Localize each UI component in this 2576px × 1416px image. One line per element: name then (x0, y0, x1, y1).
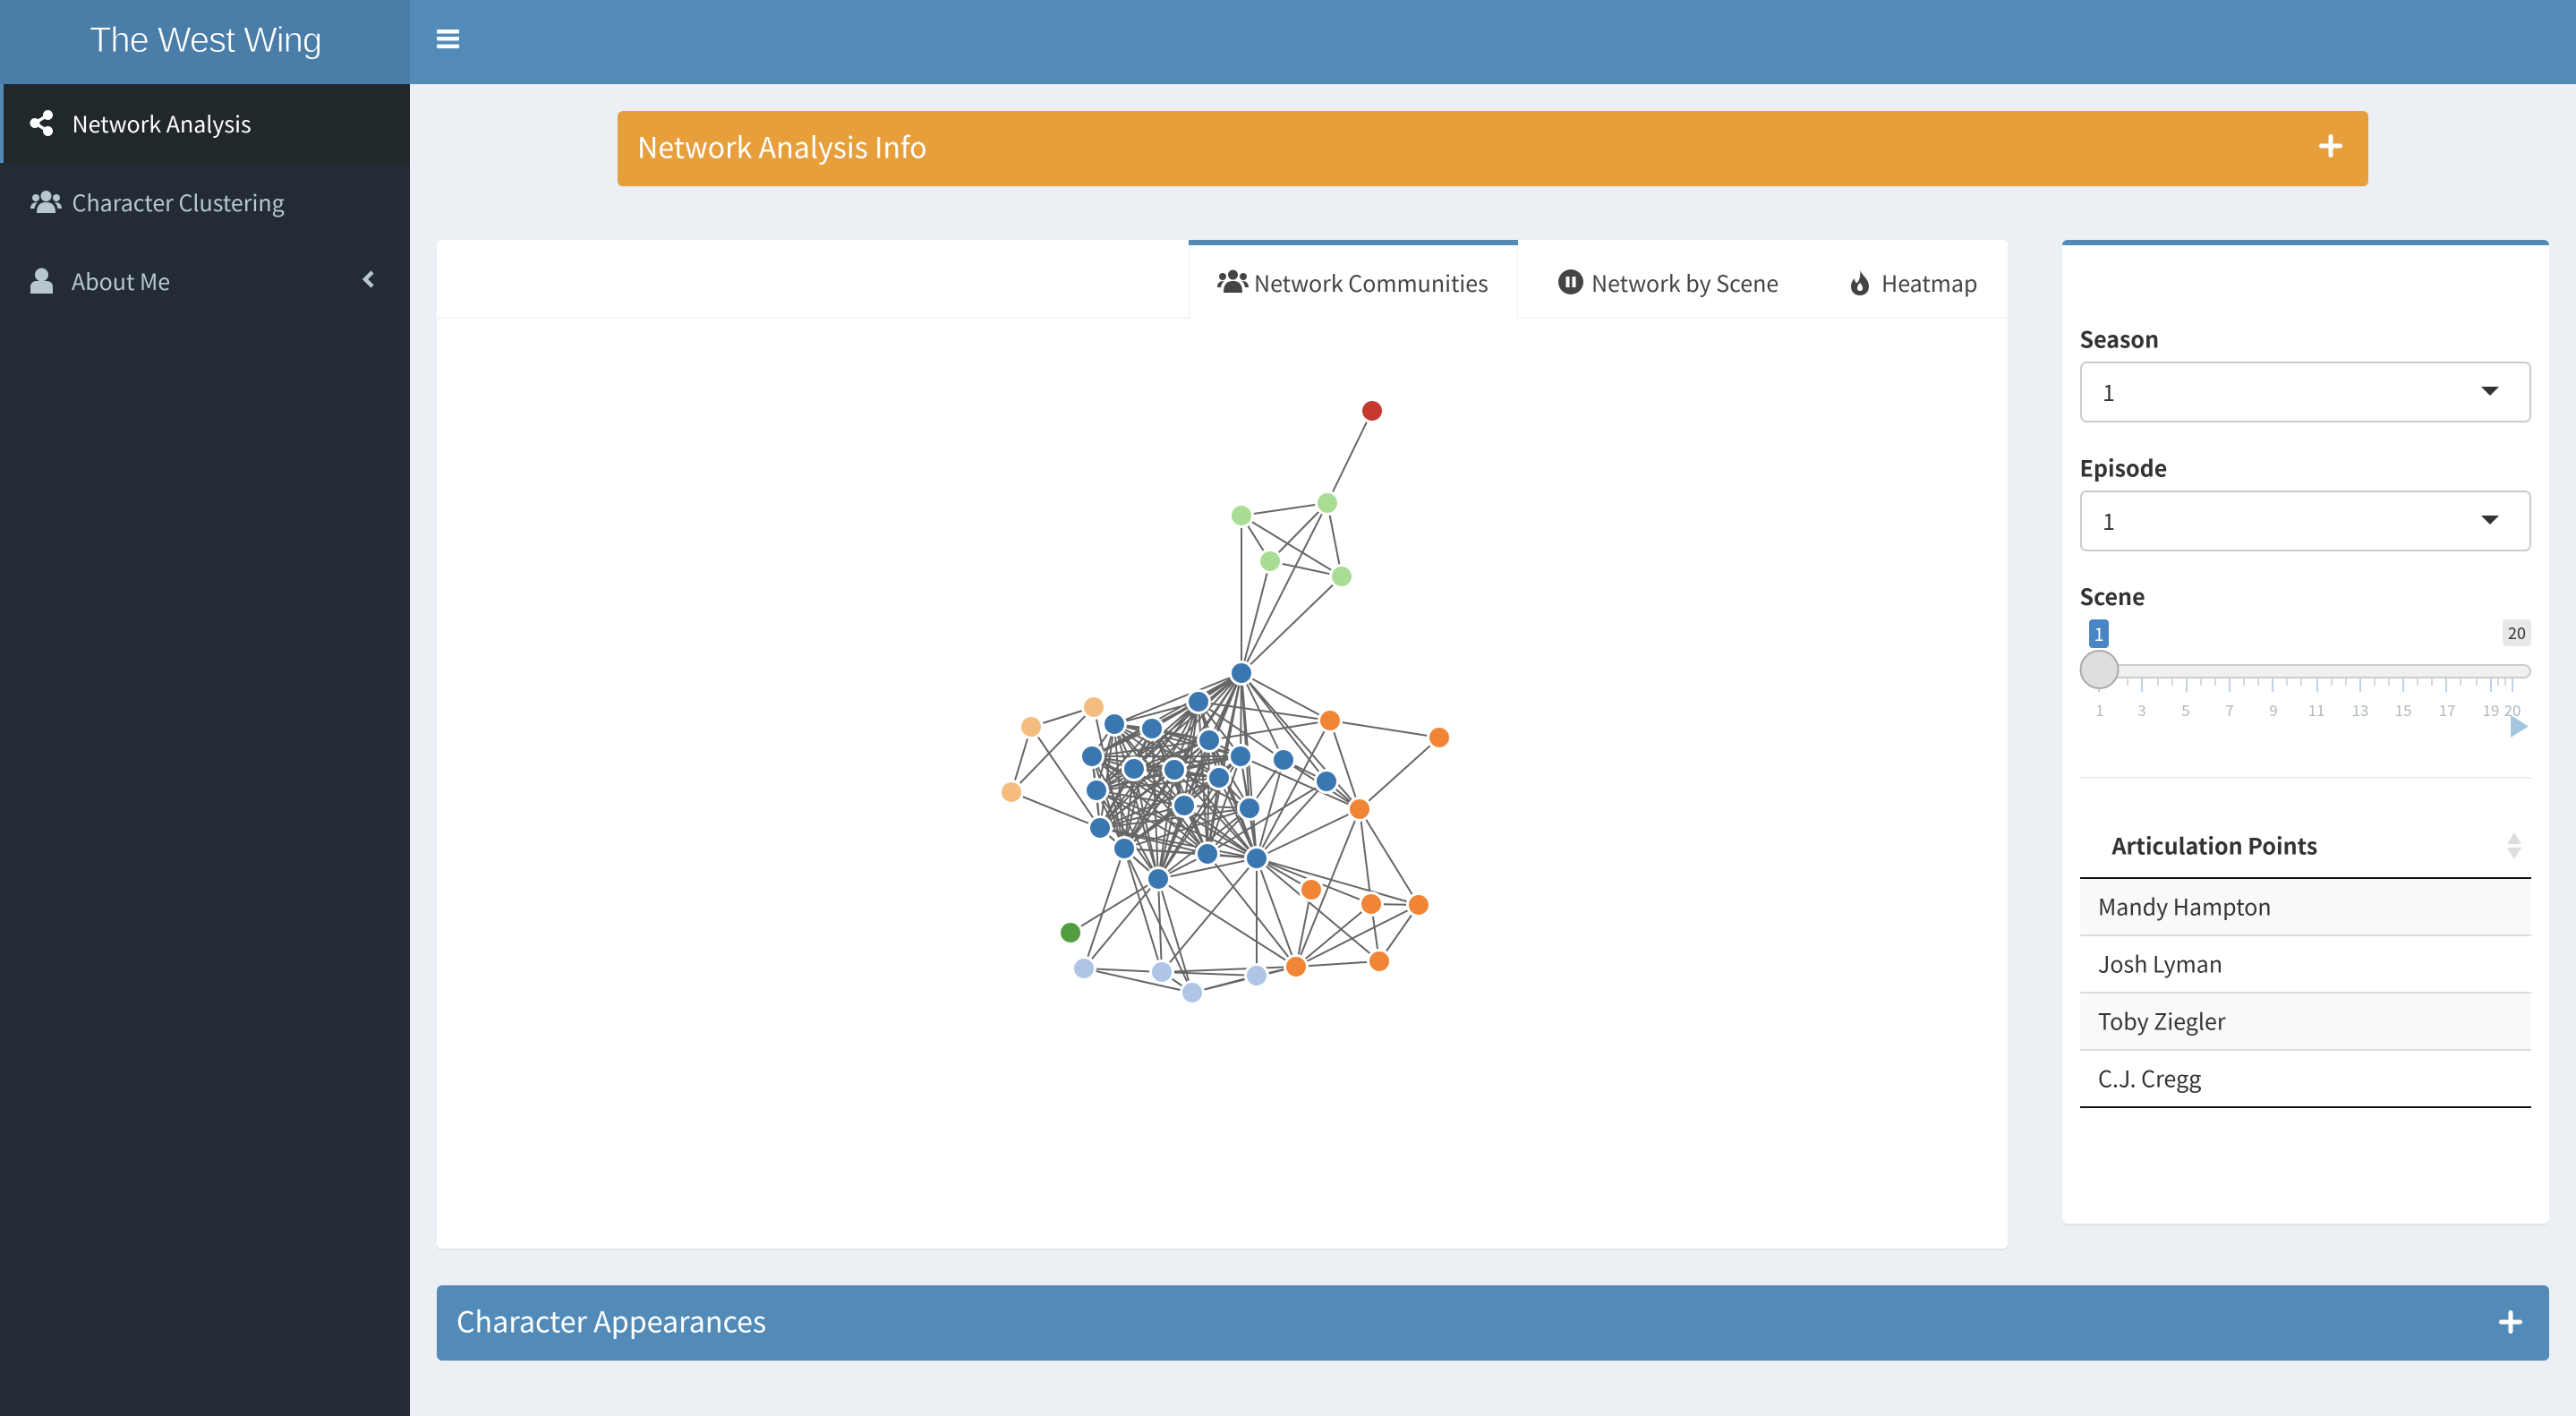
tab: Network Communities (1189, 240, 1518, 320)
table: Articulation Points: Toby Ziegler (2098, 1004, 2226, 1036)
slider: Scene: Scene (2080, 580, 2145, 612)
slider max label: 20 (2508, 621, 2526, 644)
slider tick labels: 15 (2395, 698, 2411, 721)
slider value label (2089, 619, 2109, 648)
slider value label: 1 (2094, 620, 2104, 646)
input: Episode (2080, 451, 2530, 550)
panel: Network Analysis Info collapsed box: Network Analysis Info (637, 125, 927, 166)
network graph (1001, 399, 1450, 1004)
slider track (2081, 665, 2530, 678)
input: Episode: 1 (2103, 505, 2115, 537)
icon: plus (2322, 136, 2340, 156)
icon: users (30, 191, 62, 213)
slider handle (2080, 651, 2118, 688)
slider tick labels: 20 (2504, 698, 2521, 721)
slider tick labels: 11 (2308, 698, 2324, 721)
slider tick labels: 17 (2439, 698, 2455, 721)
input: Season: Season (2080, 322, 2159, 354)
slider tick labels: 7 (2225, 698, 2234, 721)
panel: Network Analysis Info collapsed box (618, 111, 2368, 187)
icon: sort arrows (2507, 832, 2521, 859)
panel: network tab box (437, 240, 2008, 1250)
table: Articulation Points (2080, 829, 2531, 1108)
menu item: Character Clustering: Character Clustering (72, 186, 285, 218)
tab: Network Communities: Network Communities (1254, 267, 1488, 299)
panel: Character Appearances collapsed box: Character Appearances (456, 1300, 766, 1341)
menu item: Network Analysis: Network Analysis (72, 107, 252, 140)
slider: Scene (2080, 580, 2531, 738)
menu item: About Me (30, 265, 372, 297)
slider tick labels: 3 (2137, 698, 2146, 721)
input: Season (2080, 322, 2530, 422)
menu item: Network Analysis (0, 84, 410, 163)
icon: plus (2501, 1312, 2521, 1332)
table: Articulation Points: Josh Lyman (2098, 947, 2222, 979)
panel: filters and articulation points (2062, 240, 2549, 1225)
app logo title (0, 0, 410, 84)
slider tick labels: 13 (2352, 698, 2368, 721)
panel: Character Appearances collapsed box (437, 1285, 2549, 1361)
slider ticks (2099, 678, 2512, 692)
slider tick labels: 19 (2483, 698, 2499, 721)
network nodes (1001, 399, 1450, 1004)
slider tick labels (2095, 698, 2521, 721)
slider tick labels: 9 (2269, 698, 2278, 721)
menu item: About Me: About Me (72, 265, 170, 297)
icon: users (1217, 270, 1249, 293)
icon: user (30, 269, 53, 294)
icon: share (30, 110, 53, 136)
icon: hamburger menu (437, 30, 459, 48)
table: Articulation Points: Articulation Points (2111, 829, 2317, 861)
tab: Heatmap: Heatmap (1881, 267, 1978, 299)
icon: fire (1851, 269, 1869, 295)
slider max label (2503, 619, 2531, 646)
table: Articulation Points: Mandy Hampton (2098, 890, 2272, 922)
input: Season: 1 (2103, 376, 2115, 408)
app logo title: The West Wing (90, 21, 321, 60)
input: Episode: Episode (2080, 451, 2167, 483)
network edges (1011, 411, 1439, 993)
slider tick labels: 5 (2181, 698, 2190, 721)
sidebar (0, 0, 410, 1416)
top navigation bar (410, 0, 2576, 84)
table: Articulation Points: C.J. Cregg (2098, 1062, 2201, 1094)
icon: chevron (365, 272, 372, 286)
tab: Network by Scene: Network by Scene (1591, 267, 1778, 299)
icon: pause circle (1558, 269, 1583, 294)
slider tick labels: 1 (2095, 698, 2104, 721)
icon: play (2511, 715, 2529, 738)
